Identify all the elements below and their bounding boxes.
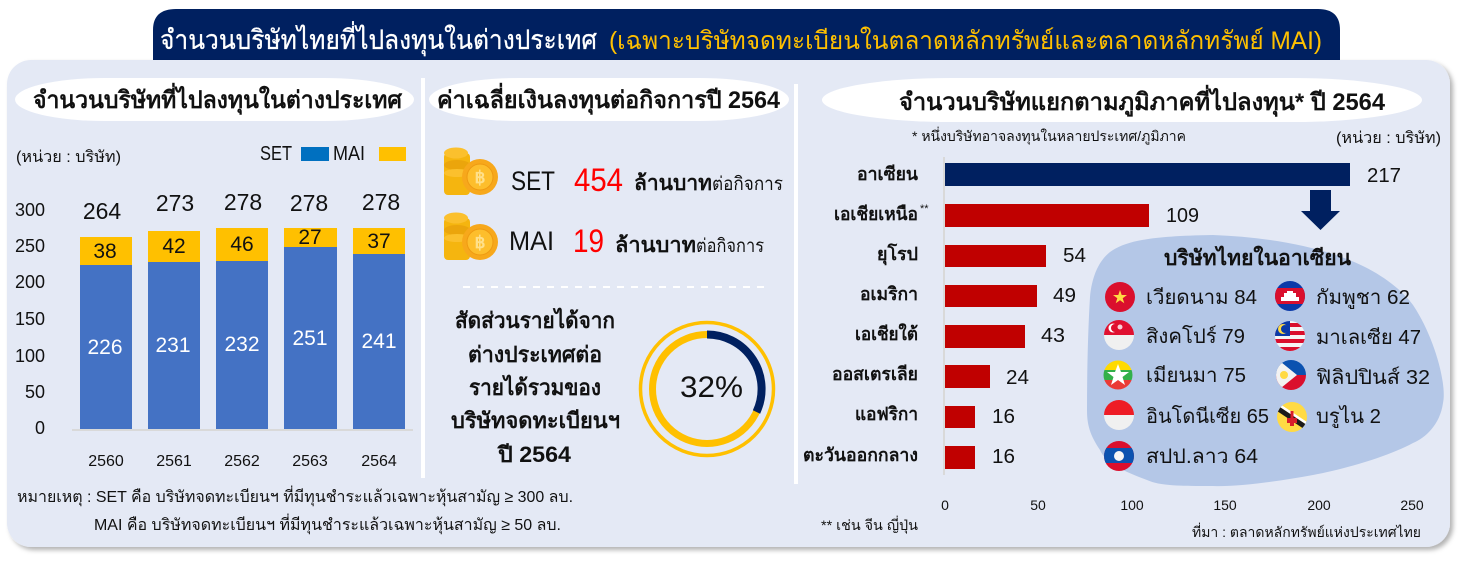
icon: SET coins (444, 148, 498, 195)
heading: average investment: ค่าเฉลี่ยเงินลงทุนต่อกิจการปี 2564 (437, 82, 781, 116)
title banner: (เฉพาะบริษัทจดทะเบียนในตลาดหลักทรัพย์และตลาดหลักทรัพย์ MAI) (609, 26, 1322, 55)
revenue share text: บริษัทจดทะเบียนฯ (451, 408, 620, 433)
source: ที่มา : ตลาดหลักทรัพย์แห่งประเทศไทย (1192, 523, 1421, 540)
stacked bar chart: 226 (87, 336, 123, 359)
horizontal bar chart: 50 (1030, 497, 1046, 513)
horizontal bar chart: เอเชียเหนือ (834, 204, 918, 224)
stacked bar chart: 2560 (88, 453, 124, 470)
horizontal bar chart: 16 (992, 446, 1015, 468)
SET average (511, 162, 783, 198)
donut chart 32%: 32% (680, 371, 743, 404)
y axis labels: 50 (25, 382, 45, 402)
MAI average: ต่อกิจการ (696, 236, 764, 257)
stacked bar chart: 241 (361, 330, 397, 353)
revenue share text (451, 307, 620, 467)
icon: SET coins: ฿ (475, 168, 486, 187)
horizontal bar chart: อเมริกา (860, 284, 918, 304)
unit label: (หน่วย : บริษัท) (16, 149, 121, 166)
ASEAN country values: ฟิลิปปินส์ 32 (1316, 366, 1430, 389)
revenue share text: รายได้รวมของ (469, 374, 601, 400)
flag: Laos (1104, 441, 1134, 471)
stacked bar chart: 264 (83, 198, 121, 224)
flag: Vietnam (1105, 282, 1135, 312)
y axis labels: 200 (15, 272, 45, 292)
legend: MAI (333, 143, 365, 165)
ASEAN country values (1146, 287, 1430, 468)
flag: Indonesia (1104, 400, 1134, 430)
blob heading: บริษัทไทยในอาเซียน (1164, 245, 1352, 270)
stacked bar chart (72, 189, 413, 470)
icon: MAI coins (444, 212, 498, 260)
revenue share text: ต่างประเทศต่อ (468, 342, 602, 367)
arrow (1301, 190, 1340, 230)
horizontal bar chart: ตะวันออกกลาง (803, 445, 918, 465)
flag: Malaysia (1275, 321, 1305, 351)
stacked bar chart: 2563 (292, 453, 328, 470)
note: SET and MAI definitions (17, 485, 573, 535)
ASEAN country values: บรูไน 2 (1316, 405, 1381, 429)
horizontal bar chart: ** (920, 203, 929, 215)
stacked bar chart: 232 (224, 333, 260, 356)
flag: Brunei (1277, 402, 1307, 432)
horizontal bar chart: 250 (1400, 497, 1424, 513)
footnote: north asia: ** เช่น จีน ญี่ปุ่น (821, 516, 918, 534)
legend: SET (260, 143, 292, 165)
horizontal bar chart: 16 (992, 406, 1015, 428)
revenue share text: สัดส่วนรายได้จาก (455, 307, 615, 333)
ASEAN country values: เมียนมา 75 (1146, 365, 1246, 387)
note: SET and MAI definitions: MAI คือ บริษัทจดทะเบียนฯ ที่มีทุนชำระแล้วเฉพาะหุ้นสามัญ ≥ 50 ลบ. (94, 513, 561, 535)
horizontal bar chart: 200 (1307, 497, 1331, 513)
panel: companies by region (803, 78, 1444, 540)
horizontal bar chart: เอเชียใต้ (855, 323, 918, 344)
heading: number of companies: จำนวนบริษัทที่ไปลงทุนในต่างประเทศ (33, 82, 403, 116)
horizontal bar chart (803, 157, 1424, 513)
horizontal bar chart: 43 (1041, 325, 1065, 347)
ASEAN country values: อินโดนีเซีย 65 (1146, 405, 1269, 428)
title banner: จำนวนบริษัทไทยที่ไปลงทุนในต่างประเทศ (160, 21, 597, 57)
MAI average: ล้านบาท (615, 233, 696, 257)
MAI average: MAI (509, 226, 554, 256)
note: SET and MAI definitions: หมายเหตุ : SET คือ บริษัทจดทะเบียนฯ ที่มีทุนชำระแล้วเฉพาะหุ้นสามัญ ≥ 300 ลบ. (17, 485, 573, 507)
MAI average (509, 223, 764, 259)
ASEAN country values: เวียดนาม 84 (1146, 287, 1257, 309)
stacked bar chart: 46 (230, 233, 254, 256)
stacked bar chart: 251 (292, 327, 328, 350)
revenue share text: ปี 2564 (497, 442, 572, 467)
stacked bar chart: 2564 (361, 453, 397, 470)
ASEAN country values: มาเลเซีย 47 (1316, 327, 1421, 349)
stacked bar chart: 231 (155, 334, 191, 357)
horizontal bar chart: 100 (1120, 497, 1144, 513)
flag: Philippines (1276, 360, 1306, 390)
horizontal bar chart: 217 (1367, 165, 1401, 187)
stacked bar chart: 42 (162, 235, 186, 258)
heading: companies by region (822, 78, 1422, 122)
SET average: SET (511, 166, 555, 196)
heading: number of companies (15, 78, 414, 121)
y axis labels: 250 (15, 236, 45, 256)
stacked bar chart: 2561 (156, 453, 192, 470)
panel: company count chart (15, 78, 425, 478)
stacked bar chart: 38 (93, 240, 117, 263)
title banner (153, 9, 1340, 62)
stacked bar chart: 2562 (224, 453, 260, 470)
ASEAN country values: สิงคโปร์ 79 (1146, 325, 1245, 348)
stacked bar chart: 278 (362, 189, 400, 215)
horizontal bar chart: อาเซียน (857, 164, 919, 184)
horizontal bar chart: 150 (1213, 497, 1237, 513)
legend (260, 143, 406, 165)
y axis labels (15, 200, 45, 438)
icon: MAI coins: ฿ (475, 233, 486, 252)
horizontal bar chart: ออสเตรเลีย (832, 364, 918, 384)
stacked bar chart: 37 (367, 230, 391, 253)
y axis labels: 150 (15, 309, 45, 329)
heading: average investment (429, 78, 789, 121)
y axis labels: 300 (15, 200, 45, 220)
horizontal bar chart: แอฟริกา (855, 404, 918, 424)
horizontal bar chart: 109 (1166, 205, 1199, 227)
flag: Myanmar (1103, 360, 1133, 390)
horizontal bar chart: 49 (1053, 285, 1076, 307)
stacked bar chart: 278 (290, 190, 328, 216)
stacked bar chart: 278 (224, 189, 262, 215)
stacked bar chart: 273 (156, 190, 194, 216)
footnote star: * หนึ่งบริษัทอาจลงทุนในหลายประเทศ/ภูมิภาค (912, 127, 1186, 145)
stacked bar chart: 27 (298, 226, 322, 249)
horizontal bar chart: 54 (1063, 245, 1086, 267)
ASEAN country values: กัมพูชา 62 (1316, 287, 1410, 310)
MAI average: 19 (573, 223, 604, 259)
donut chart 32% (640, 322, 774, 456)
SET average: ล้านบาท (634, 171, 712, 195)
heading: companies by region: จำนวนบริษัทแยกตามภูมิภาคที่ไปลงทุน* ปี 2564 (899, 84, 1386, 118)
y axis labels: 0 (35, 418, 45, 438)
flag: Singapore (1104, 320, 1134, 350)
flag: Cambodia (1275, 281, 1305, 311)
SET average: ต่อกิจการ (712, 174, 783, 195)
horizontal bar chart: 0 (941, 497, 949, 513)
SET average: 454 (574, 162, 623, 198)
y axis labels: 100 (15, 346, 45, 366)
unit label: (หน่วย : บริษัท) (1336, 130, 1441, 147)
horizontal bar chart: 24 (1006, 367, 1029, 389)
panel: average investment (429, 78, 798, 484)
horizontal bar chart: ยุโรป (877, 243, 918, 266)
panel: thai companies in ASEAN (1087, 235, 1444, 486)
ASEAN country values: สปป.ลาว 64 (1146, 446, 1258, 468)
